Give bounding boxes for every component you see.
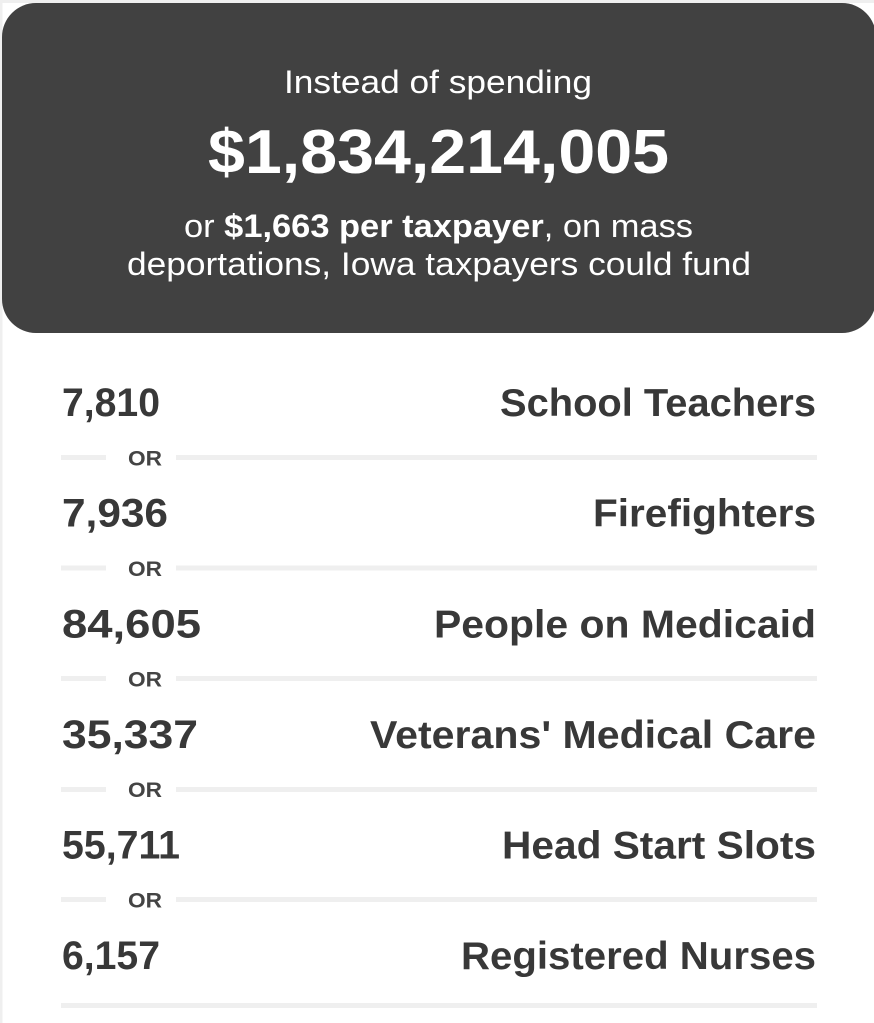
row: registered nurses xyxy=(62,934,816,978)
row: veterans' medical care: Veterans' Medical Care xyxy=(370,714,816,757)
divider: or: OR xyxy=(128,668,162,692)
row: school teachers: School Teachers xyxy=(500,382,816,425)
row: school teachers: 7,810 xyxy=(62,381,160,425)
divider: or xyxy=(61,668,817,692)
row: people on medicaid: People on Medicaid xyxy=(434,604,816,646)
divider: or xyxy=(61,888,817,912)
row: head start slots xyxy=(62,824,816,868)
row: registered nurses: 6,157 xyxy=(62,934,160,978)
row: firefighters: 7,936 xyxy=(62,492,168,536)
divider: or: OR xyxy=(128,557,162,581)
row: school teachers xyxy=(62,381,816,425)
text: could fund line: deportations, Iowa taxpayers could fund xyxy=(127,246,751,282)
divider: or xyxy=(61,557,817,581)
text: per taxpayer line: or $1,663 per taxpayer , on mass xyxy=(184,208,693,244)
heading: total cost: $1,834,214,005 xyxy=(208,118,669,187)
row: people on medicaid: 84,605 xyxy=(62,602,201,646)
divider: or: OR xyxy=(128,778,162,802)
divider: or xyxy=(61,778,817,802)
divider: or: OR xyxy=(128,446,162,470)
row: head start slots: 55,711 xyxy=(62,824,180,868)
row: veterans' medical care: 35,337 xyxy=(62,713,198,757)
divider: or: OR xyxy=(128,888,162,912)
row: firefighters: Firefighters xyxy=(593,492,816,536)
row: registered nurses: Registered Nurses xyxy=(461,935,816,978)
text: intro line: Instead of spending xyxy=(284,64,592,100)
panel: header xyxy=(2,3,874,333)
row: head start slots: Head Start Slots xyxy=(502,824,816,868)
row: veterans' medical care xyxy=(62,713,816,757)
divider: or xyxy=(61,446,817,470)
row: firefighters xyxy=(62,492,816,536)
row: people on medicaid xyxy=(62,602,816,646)
